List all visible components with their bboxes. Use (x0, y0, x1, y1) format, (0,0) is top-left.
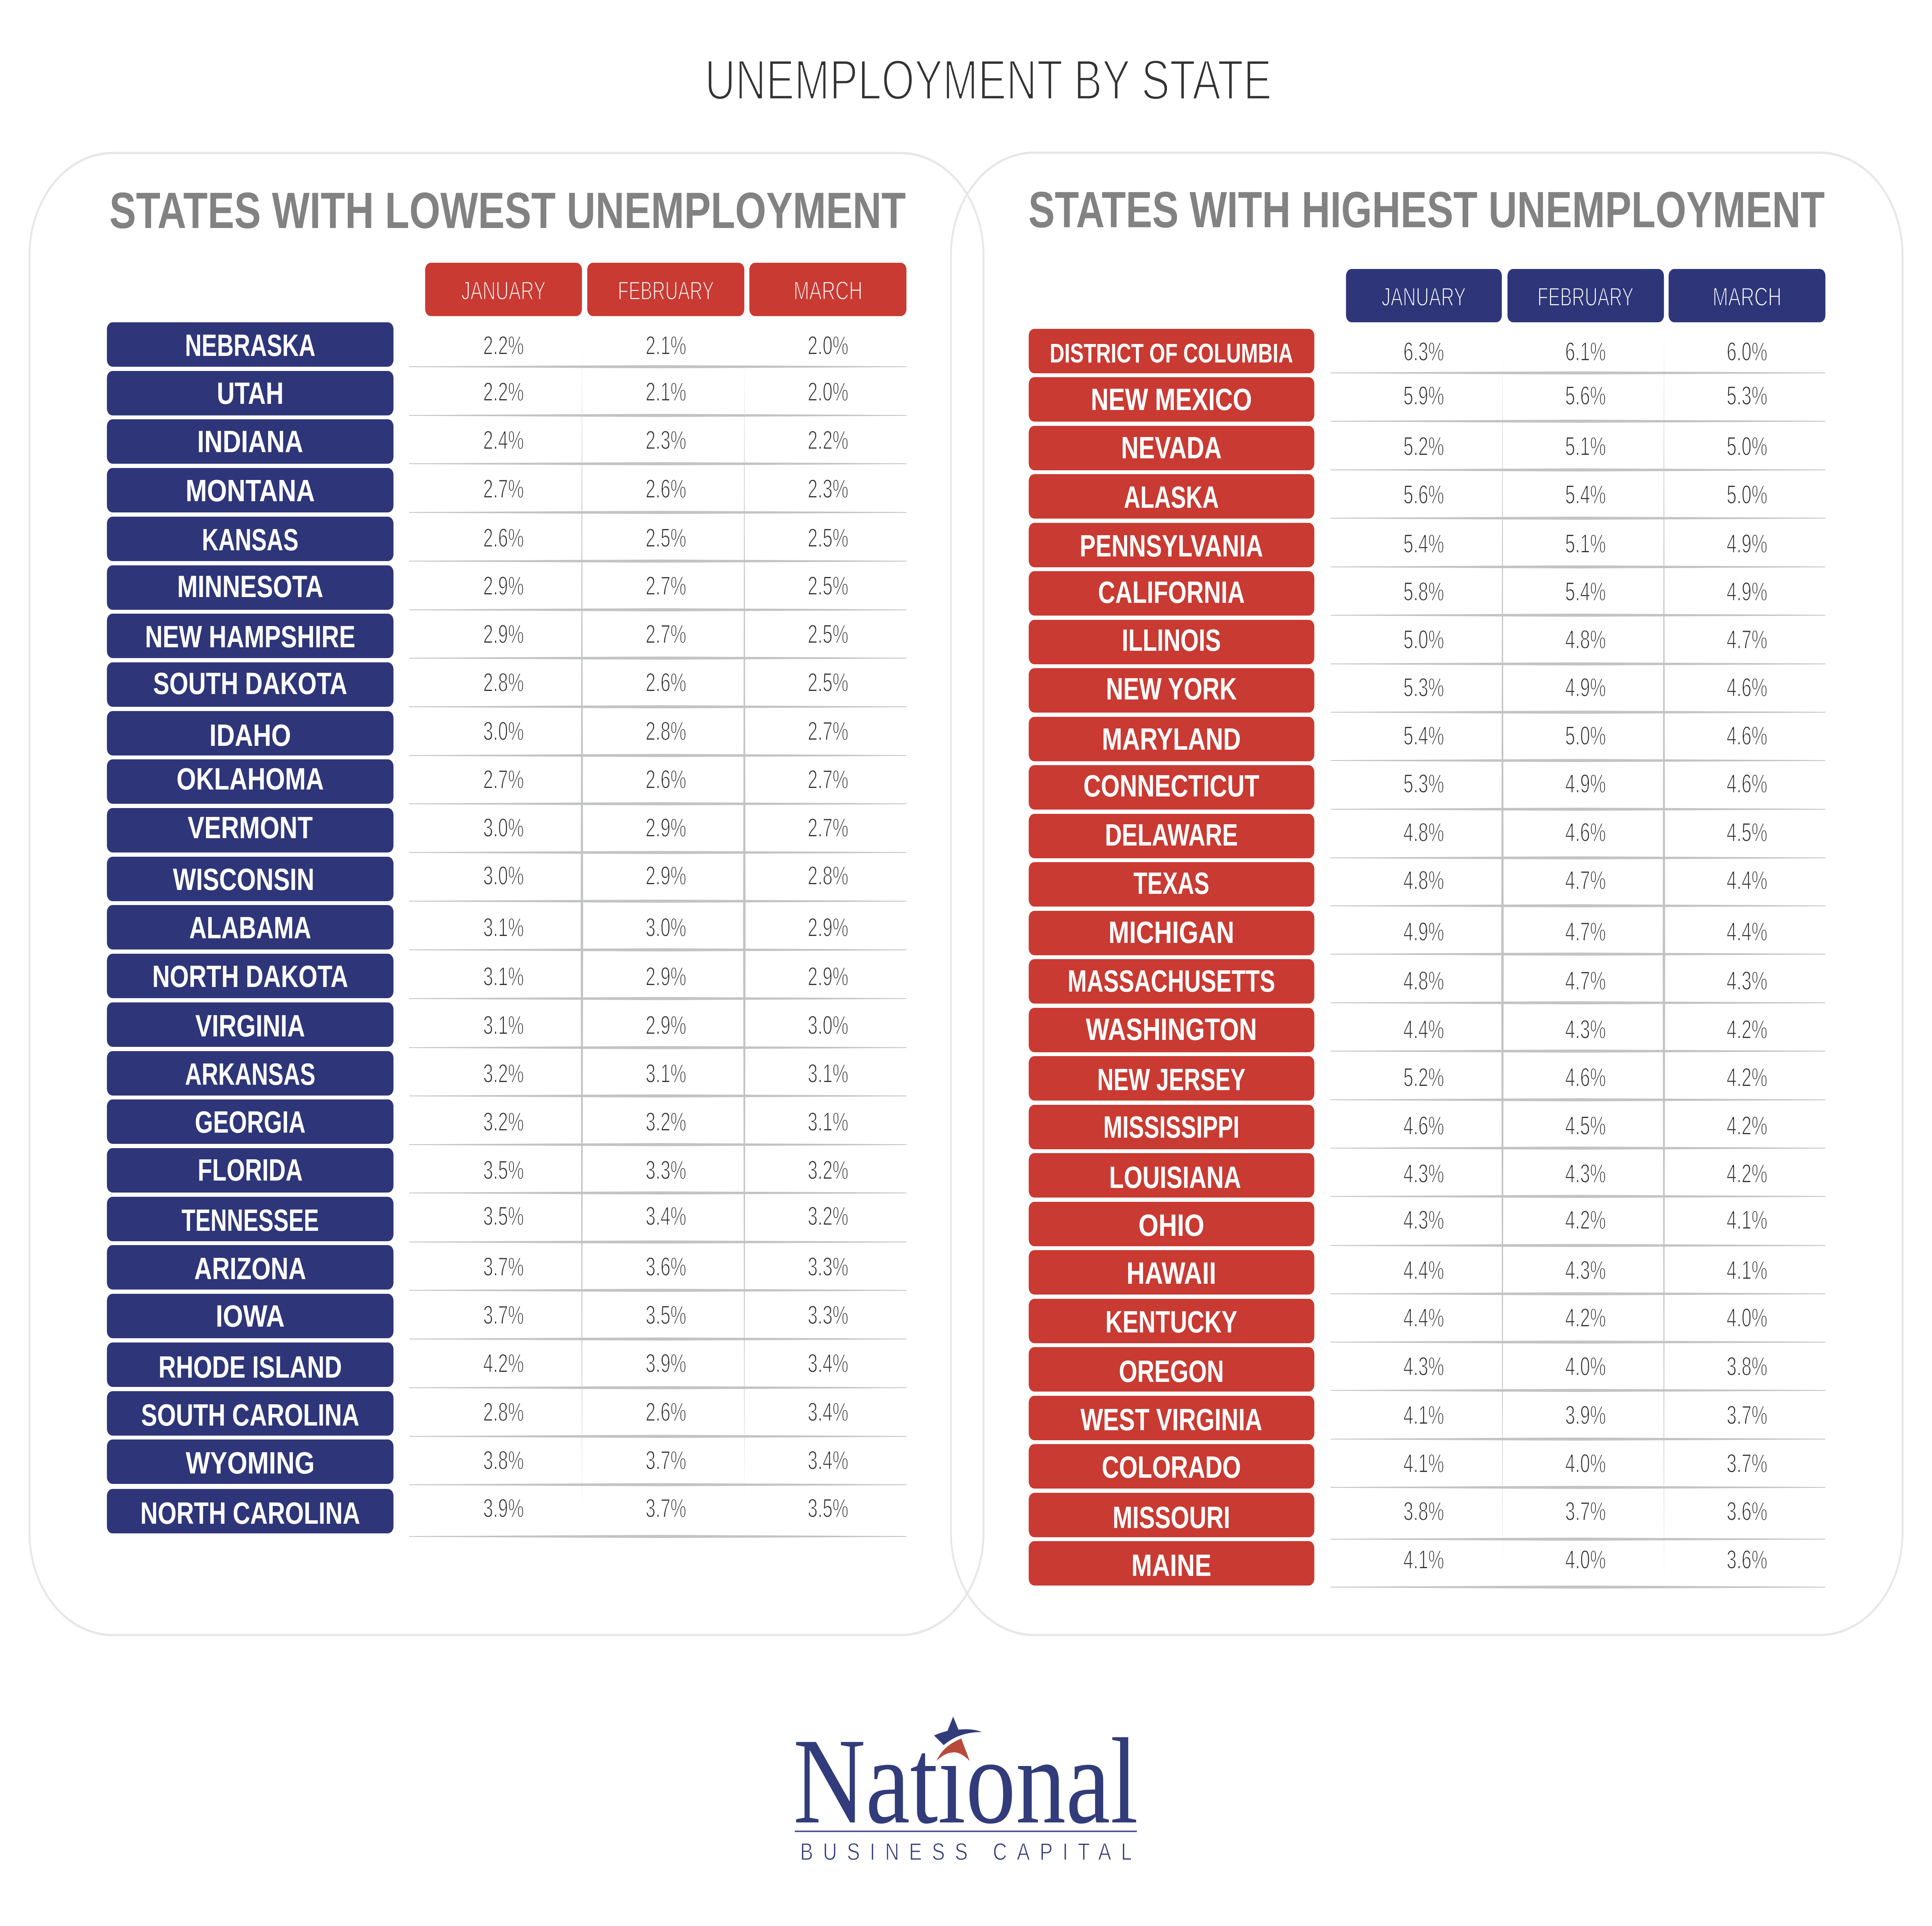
row: Tennessee: TENNESSEE (182, 1203, 319, 1238)
row: North Carolina: 3.9% (483, 1494, 524, 1523)
row: Oklahoma (107, 759, 849, 804)
row: Louisiana (1029, 1153, 1767, 1198)
row: West Virginia: WEST VIRGINIA (1080, 1403, 1262, 1437)
row: Alaska: ALASKA (1124, 480, 1219, 515)
row: Delaware (1029, 814, 1767, 858)
row: Indiana: 2.4% (483, 426, 524, 455)
row: Utah: 2.2% (483, 378, 524, 407)
row: California: 5.8% (1403, 577, 1444, 606)
row: California (1029, 571, 1767, 616)
row: Maryland: MARYLAND (1102, 722, 1241, 757)
row: Minnesota: 2.9% (483, 572, 524, 601)
row: Michigan: 4.7% (1565, 917, 1606, 946)
row: Arkansas: ARKANSAS (185, 1057, 315, 1092)
row: Minnesota (107, 565, 849, 610)
row: Connecticut: 4.9% (1565, 769, 1606, 798)
row: Tennessee (107, 1197, 849, 1241)
row: New Hampshire: 2.9% (483, 620, 524, 649)
row: Rhode Island: 3.4% (808, 1349, 849, 1378)
row: Florida: FLORIDA (198, 1153, 303, 1188)
month headers: lowest table: MARCH (794, 276, 862, 305)
row: Texas: 4.7% (1565, 866, 1606, 895)
row: Ohio: 4.1% (1727, 1206, 1767, 1235)
heading: lowest unemployment: STATES WITH LOWEST UNEMPLOYMENT (109, 182, 906, 239)
row: Iowa: 3.5% (646, 1301, 686, 1330)
row: New Jersey: 4.2% (1727, 1063, 1767, 1092)
row: Washington (1029, 1008, 1767, 1052)
row: Alaska: 5.4% (1565, 480, 1606, 509)
row: North Dakota: 2.9% (646, 962, 686, 991)
row: Kansas: 2.5% (808, 524, 849, 553)
row: Idaho: 2.8% (646, 717, 686, 746)
row: New Mexico: 5.6% (1565, 381, 1606, 410)
row: Colorado: 4.1% (1403, 1449, 1444, 1478)
row: Wisconsin: 2.8% (808, 861, 849, 890)
logo: National Business Capital (793, 1713, 1138, 1865)
row: Florida: 3.5% (483, 1156, 524, 1185)
row: Oregon: 4.3% (1403, 1352, 1444, 1381)
row: Virginia (107, 1002, 849, 1047)
row: Oregon (1029, 1347, 1767, 1392)
row: Colorado: 3.7% (1727, 1449, 1767, 1478)
row: Pennsylvania: PENNSYLVANIA (1080, 529, 1263, 563)
row: North Dakota: NORTH DAKOTA (152, 960, 348, 994)
row: Virginia: 3.0% (808, 1011, 849, 1040)
row: Kansas: 2.5% (646, 524, 686, 553)
row: Oklahoma: 2.7% (808, 765, 849, 794)
row: California: 4.9% (1727, 577, 1767, 606)
row: Delaware: 4.8% (1403, 818, 1444, 847)
row: Florida: 3.2% (808, 1156, 849, 1185)
row: Kansas (107, 517, 849, 561)
row: Wyoming: 3.4% (808, 1446, 849, 1475)
row: Pennsylvania (1029, 523, 1767, 567)
row: South Carolina: 2.8% (483, 1398, 524, 1427)
row: Ohio: 4.3% (1403, 1206, 1444, 1235)
row: Florida (107, 1148, 849, 1193)
row: Georgia: 3.2% (646, 1108, 686, 1137)
row: West Virginia: 3.7% (1727, 1401, 1767, 1430)
month headers: highest table: FEBRUARY (1537, 282, 1634, 311)
row: Connecticut: 4.6% (1727, 769, 1767, 798)
row: Texas: 4.8% (1403, 866, 1444, 895)
row: Nevada: NEVADA (1121, 431, 1222, 465)
row: Iowa: 3.7% (483, 1301, 524, 1330)
row: New York: 4.9% (1565, 673, 1606, 702)
row: Vermont: VERMONT (188, 811, 313, 845)
row: Tennessee: 3.5% (483, 1202, 524, 1231)
row: Arkansas: 3.1% (646, 1059, 686, 1088)
row: South Carolina (107, 1391, 849, 1436)
row: Montana: 2.7% (483, 475, 524, 504)
row: Hawaii (1029, 1250, 1767, 1295)
row: Arizona: 3.7% (483, 1252, 524, 1281)
row: Nebraska: 2.2% (483, 331, 524, 360)
row: Vermont: 2.7% (808, 813, 849, 842)
row: West Virginia: 4.1% (1403, 1401, 1444, 1430)
row: Oklahoma: 2.6% (646, 765, 686, 794)
row: South Dakota: 2.5% (808, 668, 849, 697)
row: Pennsylvania: 4.9% (1727, 529, 1767, 558)
row: Arizona: ARIZONA (194, 1252, 306, 1286)
row: Washington: 4.4% (1403, 1015, 1444, 1044)
row: Mississippi: 4.2% (1727, 1111, 1767, 1140)
row: Kansas: KANSAS (202, 523, 298, 557)
row: West Virginia: 3.9% (1565, 1401, 1606, 1430)
wordmark: National (793, 1713, 1138, 1849)
row: Tennessee: 3.4% (646, 1202, 686, 1231)
row: Missouri: 3.8% (1403, 1497, 1444, 1526)
row: Maryland (1029, 717, 1767, 761)
row: Nevada (1029, 426, 1767, 470)
row: District of Columbia: 6.0% (1727, 337, 1767, 366)
row: South Dakota: SOUTH DAKOTA (153, 667, 347, 701)
row: Michigan: 4.9% (1403, 917, 1444, 946)
row: Michigan: MICHIGAN (1109, 915, 1234, 950)
row: New Jersey (1029, 1056, 1767, 1101)
row: Maine: 3.6% (1727, 1545, 1767, 1574)
row: Wyoming (107, 1439, 849, 1484)
row: New Mexico (1029, 377, 1767, 422)
row: Nebraska: 2.0% (808, 331, 849, 360)
row: Hawaii: HAWAII (1126, 1256, 1216, 1291)
row: Kentucky: 4.4% (1403, 1303, 1444, 1332)
row: Delaware: 4.6% (1565, 818, 1606, 847)
row: Louisiana: 4.3% (1403, 1159, 1444, 1188)
row: Massachusetts: 4.8% (1403, 966, 1444, 995)
row: Utah: UTAH (217, 376, 284, 411)
heading: highest unemployment: STATES WITH HIGHEST UNEMPLOYMENT (1028, 181, 1825, 238)
row: South Carolina: 3.4% (808, 1398, 849, 1427)
row: Georgia: 3.1% (808, 1108, 849, 1137)
row: Alabama: 2.9% (808, 913, 849, 942)
month headers: highest table: JANUARY (1382, 282, 1466, 311)
row: Arizona: 3.3% (808, 1252, 849, 1281)
row: Louisiana: 4.3% (1565, 1159, 1606, 1188)
row: Oklahoma: OKLAHOMA (177, 762, 324, 796)
row: Delaware: 4.5% (1727, 818, 1767, 847)
row: New Hampshire: 2.5% (808, 620, 849, 649)
row: Massachusetts: MASSACHUSETTS (1068, 964, 1275, 999)
row: Wyoming: 3.8% (483, 1446, 524, 1475)
row: New Mexico: NEW MEXICO (1091, 383, 1252, 417)
row: Minnesota: 2.7% (646, 572, 686, 601)
row: Hawaii: 4.1% (1727, 1256, 1767, 1285)
row: South Dakota: 2.6% (646, 668, 686, 697)
row: Arkansas: 3.2% (483, 1059, 524, 1088)
row: Georgia: GEORGIA (195, 1105, 306, 1140)
row: Wisconsin (107, 857, 849, 901)
row: Maryland: 5.0% (1565, 721, 1606, 750)
row: New Mexico: 5.3% (1727, 381, 1767, 410)
row: Illinois (1029, 620, 1767, 664)
month headers: lowest table (425, 263, 906, 316)
row: New York: 5.3% (1403, 673, 1444, 702)
row: Wisconsin: WISCONSIN (173, 863, 314, 897)
row: Kentucky (1029, 1299, 1767, 1343)
row: North Dakota (107, 954, 849, 998)
row: Washington: WASHINGTON (1086, 1012, 1257, 1047)
row: Texas: TEXAS (1133, 866, 1209, 901)
row: Illinois: ILLINOIS (1122, 623, 1221, 658)
row: Maryland: 4.6% (1727, 721, 1767, 750)
row: Alabama: 3.0% (646, 913, 686, 942)
row: North Carolina: 3.7% (646, 1494, 686, 1523)
row: Connecticut: 5.3% (1403, 769, 1444, 798)
row: Virginia: VIRGINIA (196, 1009, 305, 1043)
row: Rhode Island (107, 1342, 849, 1387)
row: District of Columbia: 6.1% (1565, 337, 1606, 366)
row: Utah (107, 371, 849, 415)
row: New Hampshire: NEW HAMPSHIRE (145, 620, 355, 654)
row: Missouri: 3.6% (1727, 1497, 1767, 1526)
row: Vermont (107, 808, 849, 852)
tagline: BUSINESS CAPITAL (800, 1838, 1132, 1865)
row: Virginia: 2.9% (646, 1011, 686, 1040)
row: District of Columbia: DISTRICT OF COLUMBIA (1050, 338, 1293, 368)
month headers: lowest table: FEBRUARY (618, 276, 714, 305)
row: South Dakota: 2.8% (483, 668, 524, 697)
row: West Virginia (1029, 1396, 1767, 1440)
month headers: highest table: MARCH (1713, 282, 1782, 311)
row: New Hampshire: 2.7% (646, 620, 686, 649)
row: Utah: 2.1% (646, 378, 686, 407)
row: Tennessee: 3.2% (808, 1202, 849, 1231)
row: Wyoming: WYOMING (186, 1446, 315, 1480)
row: Kentucky: KENTUCKY (1105, 1305, 1237, 1339)
title: UNEMPLOYMENT BY STATE (705, 49, 1272, 112)
row: Oregon: 4.0% (1565, 1352, 1606, 1381)
row: Alabama (107, 905, 849, 949)
row: Michigan (1029, 911, 1767, 955)
row: Nebraska (107, 322, 849, 367)
row: Nevada: 5.1% (1565, 432, 1606, 461)
row: Texas (1029, 862, 1767, 907)
row: Pennsylvania: 5.4% (1403, 529, 1444, 558)
row: Arkansas: 3.1% (808, 1059, 849, 1088)
row: California: 5.4% (1565, 577, 1606, 606)
row: Florida: 3.3% (646, 1156, 686, 1185)
row: Alabama: ALABAMA (189, 911, 311, 945)
row: Louisiana: 4.2% (1727, 1159, 1767, 1188)
row: Rhode Island: RHODE ISLAND (158, 1350, 342, 1385)
row: Hawaii: 4.3% (1565, 1256, 1606, 1285)
row: Nebraska: NEBRASKA (185, 328, 315, 363)
row: Washington: 4.2% (1727, 1015, 1767, 1044)
row: District of Columbia (1029, 329, 1767, 373)
row: Indiana: 2.3% (646, 426, 686, 455)
row: California: CALIFORNIA (1098, 575, 1245, 610)
row: Nevada: 5.2% (1403, 432, 1444, 461)
row: Georgia: 3.2% (483, 1108, 524, 1137)
row: Kentucky: 4.0% (1727, 1303, 1767, 1332)
row: Minnesota: MINNESOTA (177, 570, 323, 604)
row: Montana: 2.3% (808, 475, 849, 504)
row: South Carolina: 2.6% (646, 1398, 686, 1427)
row: Idaho: IDAHO (209, 718, 291, 753)
row: New York (1029, 668, 1767, 713)
row: North Carolina (107, 1489, 849, 1533)
panel: states with highest unemployment (951, 153, 1903, 1635)
row: Kansas: 2.6% (483, 524, 524, 553)
row: Alaska (1029, 474, 1767, 519)
row: Rhode Island: 3.9% (646, 1349, 686, 1378)
row: Idaho: 3.0% (483, 717, 524, 746)
row: New York: NEW YORK (1106, 672, 1237, 706)
row: Maine (1029, 1541, 1767, 1586)
row: Connecticut (1029, 765, 1767, 810)
row: Minnesota: 2.5% (808, 572, 849, 601)
row: Mississippi (1029, 1105, 1767, 1149)
row: North Dakota: 2.9% (808, 962, 849, 991)
row: Colorado: COLORADO (1102, 1450, 1241, 1485)
row: Pennsylvania: 5.1% (1565, 529, 1606, 558)
row: Utah: 2.0% (808, 378, 849, 407)
row: Iowa: 3.3% (808, 1301, 849, 1330)
row: Hawaii: 4.4% (1403, 1256, 1444, 1285)
row: Montana: MONTANA (185, 474, 315, 508)
row: Virginia: 3.1% (483, 1011, 524, 1040)
row: Wisconsin: 2.9% (646, 861, 686, 890)
row: Michigan: 4.4% (1727, 917, 1767, 946)
row: Indiana: 2.2% (808, 426, 849, 455)
row: Illinois: 4.8% (1565, 625, 1606, 654)
row: New Jersey: 4.6% (1565, 1063, 1606, 1092)
row: District of Columbia: 6.3% (1403, 337, 1444, 366)
row: Nebraska: 2.1% (646, 331, 686, 360)
row: Louisiana: LOUISIANA (1109, 1160, 1241, 1195)
row: Colorado: 4.0% (1565, 1449, 1606, 1478)
row: Georgia (107, 1099, 849, 1144)
row: Missouri: MISSOURI (1112, 1501, 1230, 1535)
row: South Dakota (107, 662, 849, 707)
row: Washington: 4.3% (1565, 1015, 1606, 1044)
row: North Carolina: 3.5% (808, 1494, 849, 1523)
row: New York: 4.6% (1727, 673, 1767, 702)
row: Idaho (107, 711, 849, 755)
row: South Carolina: SOUTH CAROLINA (141, 1398, 359, 1433)
row: Maine: MAINE (1131, 1548, 1211, 1583)
row: Vermont: 2.9% (646, 813, 686, 842)
row: Idaho: 2.7% (808, 717, 849, 746)
row: Arizona: 3.6% (646, 1252, 686, 1281)
row: Montana (107, 468, 849, 512)
month headers: highest table (1346, 269, 1825, 322)
row: Maine: 4.1% (1403, 1545, 1444, 1574)
row: Alabama: 3.1% (483, 913, 524, 942)
row: Nevada: 5.0% (1727, 432, 1767, 461)
icon: star (934, 1717, 982, 1761)
row: Illinois: 5.0% (1403, 625, 1444, 654)
row: New Hampshire (107, 614, 849, 658)
row: Wisconsin: 3.0% (483, 861, 524, 890)
row: Indiana: INDIANA (197, 425, 303, 459)
row: New Mexico: 5.9% (1403, 381, 1444, 410)
row: New Jersey: 5.2% (1403, 1063, 1444, 1092)
row: Alaska: 5.0% (1727, 480, 1767, 509)
row: Missouri: 3.7% (1565, 1497, 1606, 1526)
row: Massachusetts: 4.7% (1565, 966, 1606, 995)
row: Maryland: 5.4% (1403, 721, 1444, 750)
row: Mississippi: 4.6% (1403, 1111, 1444, 1140)
row: New Jersey: NEW JERSEY (1097, 1063, 1245, 1097)
row: Arizona (107, 1245, 849, 1290)
row: Iowa (107, 1294, 849, 1338)
row: Kentucky: 4.2% (1565, 1303, 1606, 1332)
row: Ohio (1029, 1202, 1767, 1246)
row: Ohio: OHIO (1138, 1208, 1204, 1243)
row: Vermont: 3.0% (483, 813, 524, 842)
row: Missouri (1029, 1493, 1767, 1537)
row: Rhode Island: 4.2% (483, 1349, 524, 1378)
row: Ohio: 4.2% (1565, 1206, 1606, 1235)
row: Connecticut: CONNECTICUT (1083, 769, 1259, 803)
month headers: lowest table: JANUARY (461, 276, 546, 305)
row: Montana: 2.6% (646, 475, 686, 504)
row: Alaska: 5.6% (1403, 480, 1444, 509)
row: Oklahoma: 2.7% (483, 765, 524, 794)
row: Massachusetts: 4.3% (1727, 966, 1767, 995)
panel: states with lowest unemployment (29, 153, 983, 1635)
row: Indiana (107, 419, 849, 464)
row: Iowa: IOWA (216, 1299, 285, 1334)
row: Massachusetts (1029, 959, 1767, 1004)
row: Arkansas (107, 1051, 849, 1096)
row: Texas: 4.4% (1727, 866, 1767, 895)
row: Delaware: DELAWARE (1105, 818, 1238, 852)
row: Oregon: OREGON (1119, 1354, 1224, 1389)
row: Mississippi: MISSISSIPPI (1103, 1110, 1240, 1145)
row: Wyoming: 3.7% (646, 1446, 686, 1475)
row: North Carolina: NORTH CAROLINA (140, 1496, 360, 1531)
row: Maine: 4.0% (1565, 1545, 1606, 1574)
row: North Dakota: 3.1% (483, 962, 524, 991)
row: Oregon: 3.8% (1727, 1352, 1767, 1381)
row: Illinois: 4.7% (1727, 625, 1767, 654)
row: Mississippi: 4.5% (1565, 1111, 1606, 1140)
row: Colorado (1029, 1444, 1767, 1489)
